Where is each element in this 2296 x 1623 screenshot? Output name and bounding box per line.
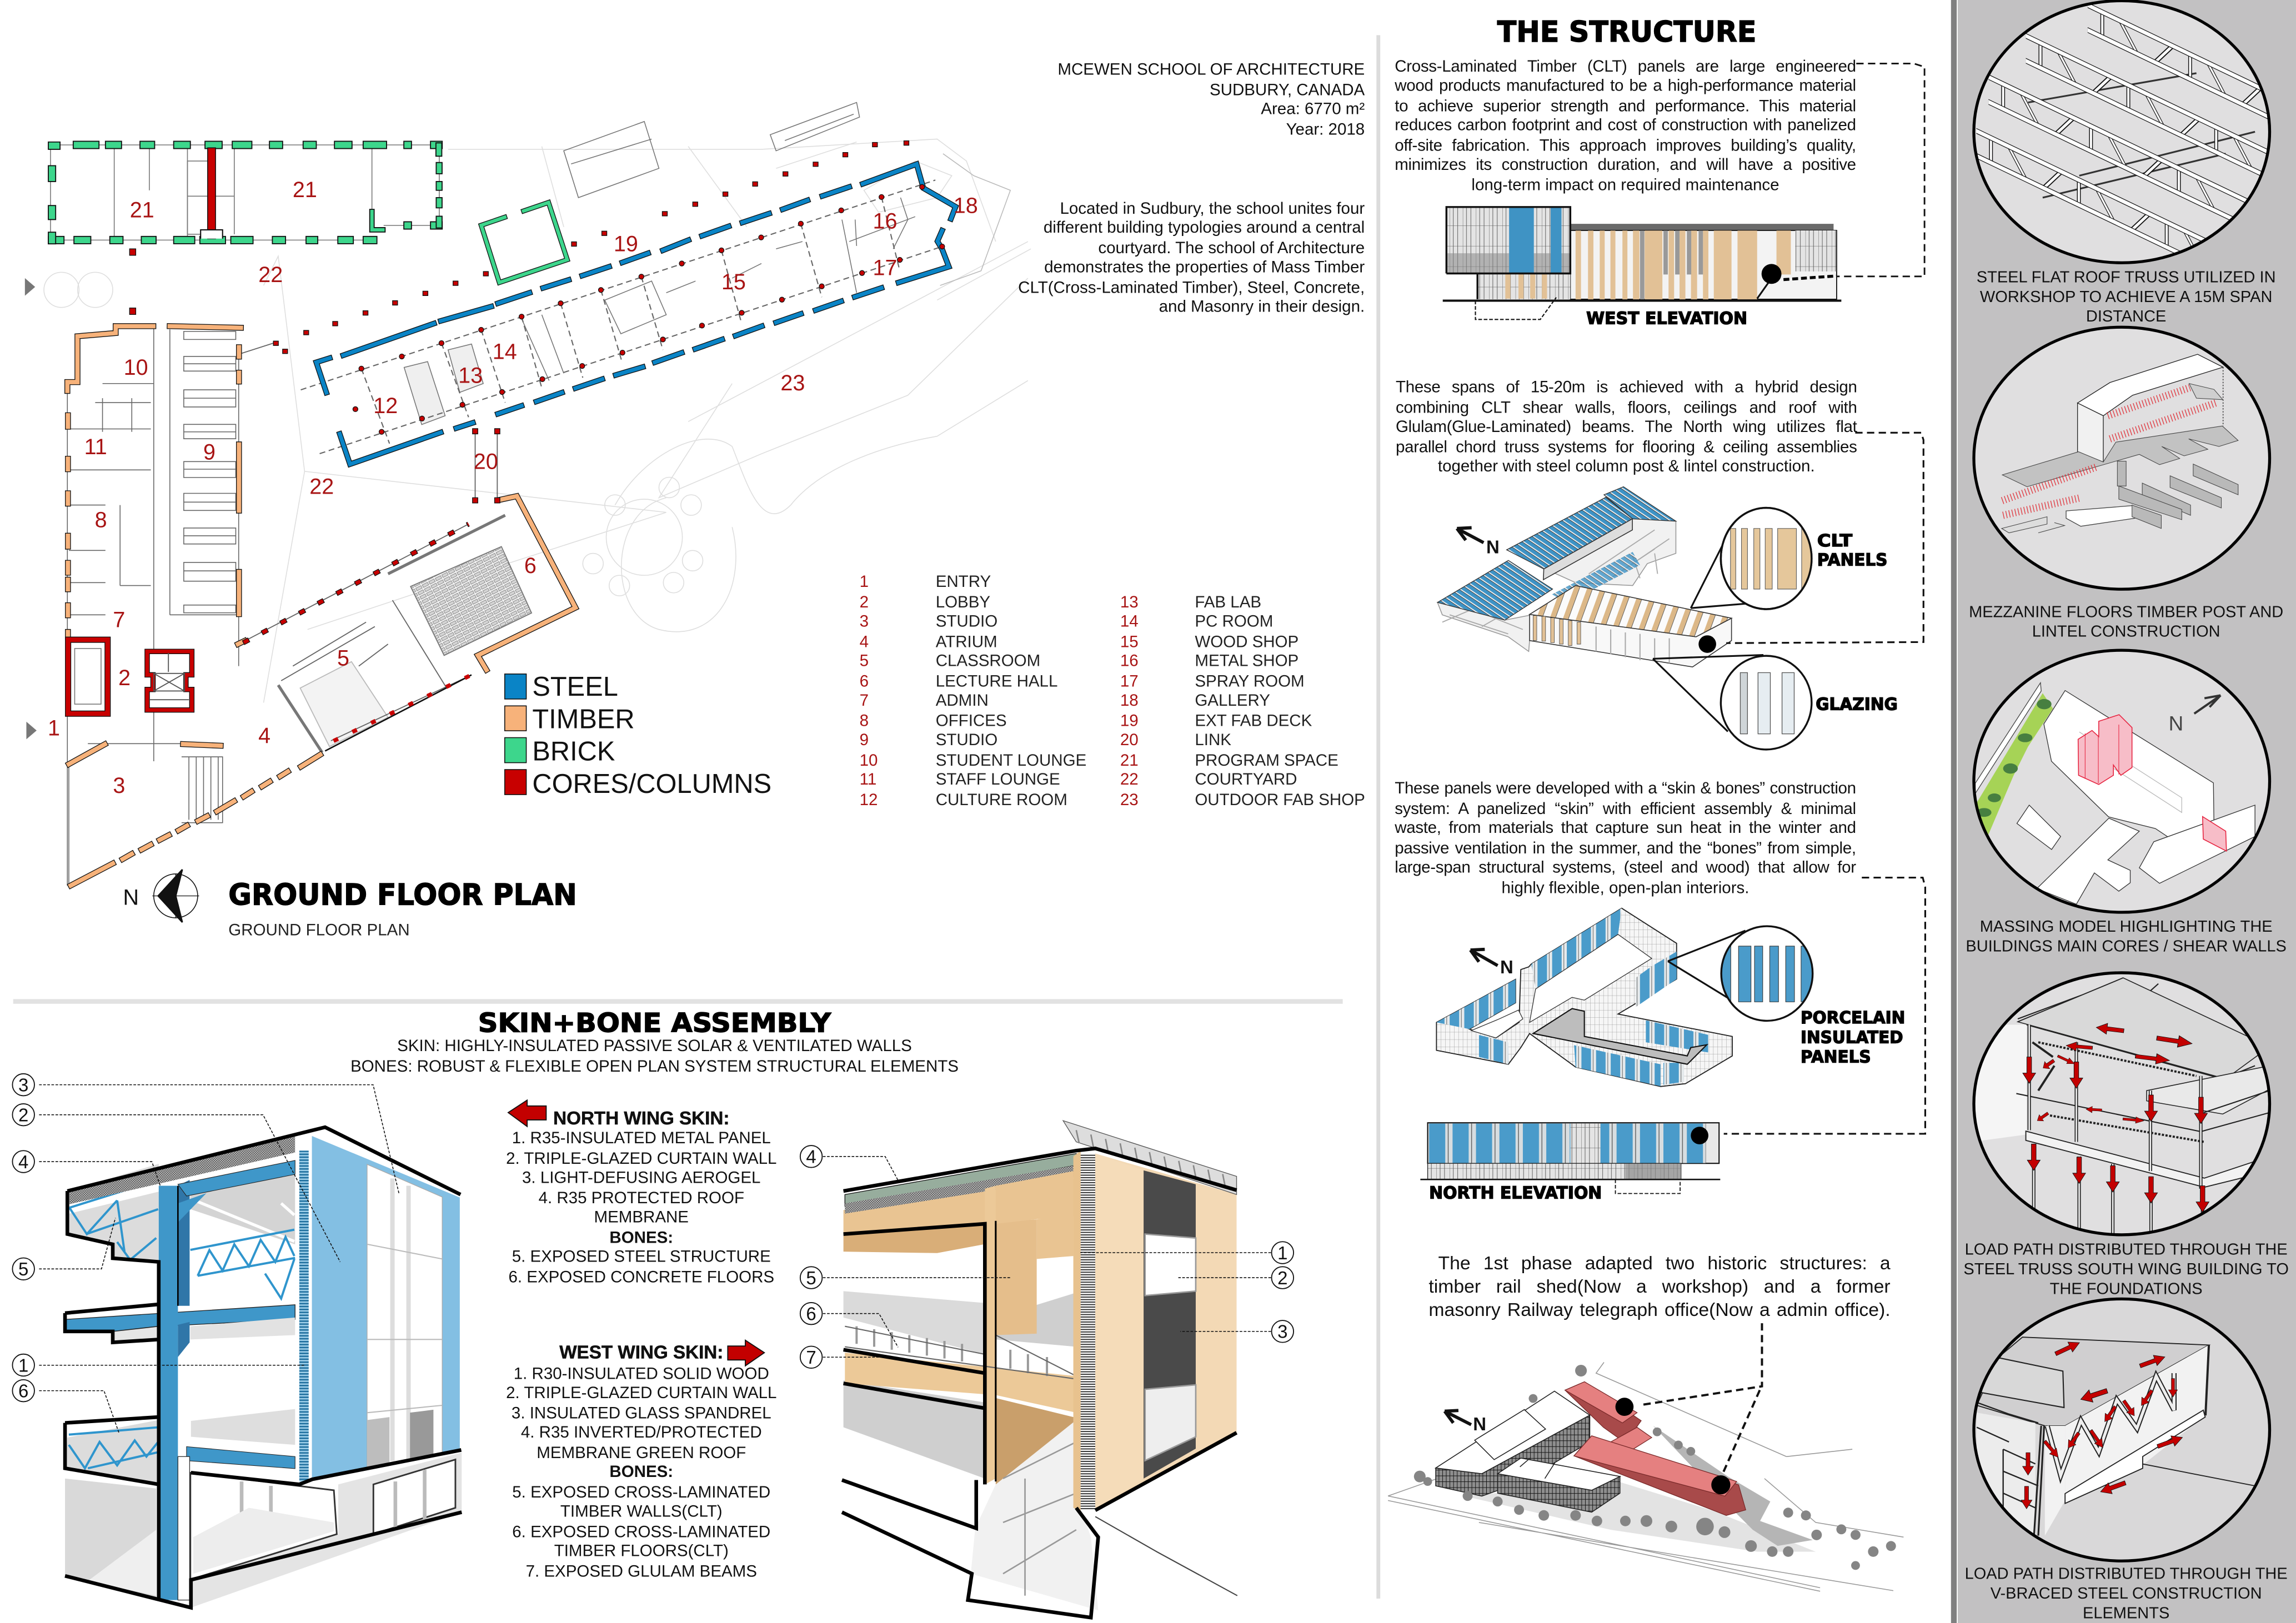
north wing specification list: MEMBRANE [594,1209,689,1227]
project description: courtyard. The school of Architecture [1098,239,1365,257]
room key names 13-23 [1195,594,1365,809]
callout 6: 6 [18,1381,28,1401]
caption: mezzanine timber: LINTEL CONSTRUCTION [2032,623,2220,641]
circle: steel roof truss [1972,0,2272,264]
callout 7 [800,1346,822,1368]
text block: hybrid spans [1396,379,1857,476]
room numbers: 13 [458,363,483,388]
caption: steel roof truss: STEEL FLAT ROOF TRUSS UTILIZED IN [1977,268,2276,286]
room key names 1-12: ATRIUM [936,634,997,651]
room numbers: 16 [873,209,897,233]
north wing specification list: 2. TRIPLE-GLAZED CURTAIN WALL [506,1150,776,1168]
room numbers: 7 [113,607,125,632]
label: north elevation: NORTH ELEVATION [1429,1183,1602,1203]
room key numbers 1-12: 10 [860,752,878,770]
facade shell [1436,908,1732,1087]
project description: CLT(Cross-Laminated Timber), Steel, Concrete, [1018,279,1365,297]
skin and bone title: SKIN+BONE ASSEMBLY [478,1008,831,1039]
callout 6: 6 [806,1304,816,1324]
north wing specification list: 1. R35-INSULATED METAL PANEL [512,1130,771,1148]
room key numbers 13-23: 13 [1120,594,1139,612]
panel: right grey strip [1951,0,2296,1623]
west wing specification list: 4. R35 INVERTED/PROTECTED [521,1425,762,1443]
caption: south wing load path: LOAD PATH DISTRIBUTED THROUGH THE [1965,1240,2288,1258]
room key numbers 13-23: 17 [1120,673,1139,691]
room key names 1-12: STAFF LOUNGE [936,772,1060,790]
roof layers [845,1154,1076,1206]
callout 1: 1 [1277,1243,1287,1263]
text block: skin and bones [1395,780,1856,897]
dashed connector: north elevation [1724,878,1925,1134]
room key numbers 13-23: 22 [1120,772,1139,790]
lower floor [65,1420,159,1484]
plan subtitle: GROUND FLOOR PLAN [228,921,410,939]
timber wall [996,1219,1037,1335]
truss frames [1437,519,1676,651]
room key numbers 1-12: 11 [860,772,876,790]
north wing specification list: 5. EXPOSED STEEL STRUCTURE [512,1249,771,1267]
lower grey level [844,1380,985,1479]
room key names 1-12: LOBBY [936,594,990,612]
icon: north arrow: N [1473,1414,1486,1434]
room numbers: 9 [203,440,215,464]
brick walls [48,141,442,244]
room numbers: 2 [118,666,131,690]
text block: first phase [1428,1252,1891,1320]
room numbers [48,178,978,798]
west wing specification list: 2. TRIPLE-GLAZED CURTAIN WALL [506,1385,776,1403]
icon: north arrow [1457,527,1500,557]
faint site context [44,139,1031,703]
red historic buildings [1565,1382,1746,1515]
callout 3: 3 [18,1074,28,1095]
callout 5: 5 [18,1259,28,1279]
courtyard [1533,1009,1707,1064]
lower windows [191,1460,455,1580]
room key numbers 13-23: 18 [1120,693,1139,710]
label: porcelain insulated panels: PANELS [1801,1048,1871,1067]
label: west elevation: WEST ELEVATION [1586,309,1747,329]
vertical divider [1376,35,1380,1599]
north wing specification list: BONES: [609,1229,673,1247]
room key numbers 13-23: 20 [1120,732,1139,750]
dashed connector: site [1640,1323,1762,1474]
project description: demonstrates the properties of Mass Timber [1044,259,1365,277]
room key numbers 1-12: 2 [860,594,869,612]
room key names 1-12: STUDENT LOUNGE [936,752,1086,770]
room key numbers 13-23: 15 [1120,634,1139,651]
caption: south wing load path: STEEL TRUSS SOUTH WING BUILDING TO [1963,1260,2289,1278]
text block: first phase: masonry Railway telegraph office(Now a admin office). [1428,1299,1891,1320]
callout 2 [1272,1267,1294,1289]
west wing specification list: 7. EXPOSED GLULAM BEAMS [526,1563,757,1581]
north elevation drawing [1420,1123,1720,1194]
blue steel trusses [69,1180,295,1468]
room key names 13-23: LINK [1195,732,1231,750]
upper wood beams [844,1178,1076,1234]
room key numbers 1-12: 9 [860,732,869,750]
upper ceiling [191,1174,295,1244]
red load arrows [2023,1022,2209,1212]
room key numbers 13-23 [1120,594,1139,809]
callout 6 [12,1380,34,1401]
legend: materials [505,672,771,799]
west wing specification list: MEMBRANE GREEN ROOF [537,1445,746,1462]
curtain wall hatch edge [299,1150,309,1481]
thick black outline [65,1127,462,1607]
project info [1057,62,1365,138]
room numbers: 14 [493,339,517,364]
label: porcelain insulated panels: PORCELAIN [1801,1008,1905,1028]
callout 2 [12,1104,34,1125]
north wing specification list: 4. R35 PROTECTED ROOF [539,1189,744,1207]
project info: MCEWEN SCHOOL OF ARCHITECTURE [1057,62,1365,79]
room numbers: 23 [780,371,805,395]
west elevation drawing [1443,207,1841,319]
north compass [123,870,199,922]
caption: v-braced load path: V-BRACED STEEL CONSTRUCTION [1991,1585,2262,1602]
icon: north wing red arrow [508,1100,546,1127]
skin and bone subtitle: BONES: ROBUST & FLEXIBLE OPEN PLAN SYSTEM STRUCTURAL ELEMENTS [350,1058,959,1075]
west wing callouts [823,1157,1271,1357]
room key names 1-12: STUDIO [936,614,997,631]
circle: v-braced load path [1973,1298,2270,1562]
icon: north arrow: N [1500,957,1513,977]
callout 3 [1272,1320,1294,1343]
west wing specification list: TIMBER FLOORS(CLT) [554,1544,729,1561]
west wing specification list: 3. INSULATED GLASS SPANDREL [512,1405,771,1423]
north arrow in circle [2194,695,2220,713]
porcelain skin axonometric [1436,908,1732,1087]
room key numbers 13-23: 14 [1120,614,1139,631]
north wing specification list: 3. LIGHT-DEFUSING AEROGEL [522,1170,760,1187]
room key numbers 1-12: 1 [860,574,869,592]
callout 3: 3 [1277,1321,1287,1342]
west wing specification list [506,1343,776,1581]
room numbers: 3 [113,773,125,798]
room key names 1-12: ADMIN [936,693,989,710]
callout 1 [12,1354,34,1376]
caption: south wing load path: THE FOUNDATIONS [2050,1280,2203,1298]
room numbers: 11 [84,435,107,459]
text block: skin and bones: passive ventilation in the summer, and the “bones” from simple, [1395,840,1856,857]
site axonometric [1388,1362,1903,1591]
text block: CLT panels: long-term impact on required maintenance [1471,177,1779,194]
caption: mezzanine timber: MEZZANINE FLOORS TIMBER POST AND [1969,603,2283,621]
icon: west wing red arrow [728,1340,764,1366]
room key names 13-23: PROGRAM SPACE [1195,752,1339,770]
dark facades [1436,1415,1590,1496]
mid floor [845,1353,1076,1413]
room key names 13-23: SPRAY ROOM [1195,673,1305,691]
north wing section drawing [65,1127,462,1607]
room key names 13-23: FAB LAB [1195,594,1261,612]
room key names 13-23: OUTDOOR FAB SHOP [1195,792,1365,809]
text block: skin and bones: waste, from materials that capture sun heat in the winter and [1395,820,1856,837]
room numbers: 10 [124,355,148,380]
floor plan drawing [25,103,1031,886]
room key names 1-12: CLASSROOM [936,654,1040,671]
room numbers: 21 [130,198,154,222]
callout 5 [800,1267,822,1289]
room key numbers 1-12 [860,574,878,809]
caption: v-braced load path: ELEMENTS [2083,1604,2169,1622]
room key names 13-23: WOOD SHOP [1195,634,1299,651]
west wing specification list: WEST WING SKIN: [559,1343,723,1363]
callout 4 [800,1145,822,1168]
dashed connector: axonometric [1726,433,1923,643]
timber walls [67,326,575,886]
text block: first phase: The 1st phase adapted two historic structures: a [1438,1252,1891,1274]
text block: hybrid spans: together with steel column post & lintel construction. [1438,458,1815,476]
room key names 13-23: COURTYARD [1195,772,1297,790]
room numbers: 1 [48,716,60,741]
foundation [971,1420,1098,1610]
room numbers: 19 [614,232,638,256]
caption: massing model: MASSING MODEL HIGHLIGHTING THE [1980,918,2273,936]
skin and bone subtitle [350,1038,959,1075]
callout 5: 5 [806,1268,816,1288]
text block: hybrid spans: Glulam(Glue-Laminated) beams. The North wing utilizes flat [1396,419,1857,436]
room key numbers 13-23: 21 [1120,752,1139,770]
legend item: timber: TIMBER [532,704,635,734]
label: circle north: N [2169,712,2183,735]
upper left soffit [68,1164,159,1262]
callout 6 [800,1303,822,1324]
skin and bone subtitle: SKIN: HIGHLY-INSULATED PASSIVE SOLAR & VENTILATED WALLS [397,1038,912,1056]
white roofs [1436,1391,1620,1490]
text block: hybrid spans: parallel chord truss systems for flooring & ceiling assemblies [1396,439,1857,456]
text block: CLT panels: minimizes its construction duration, and will have a positive [1395,157,1856,174]
project info: Year: 2018 [1286,121,1365,138]
detail circle: CLT panels [1691,508,1812,609]
north compass: N [123,885,139,910]
label: CLT panels [1817,531,1887,570]
room key names 13-23: EXT FAB DECK [1195,712,1312,730]
north wing specification list: NORTH WING SKIN: [553,1107,729,1128]
legend item: brick: BRICK [532,737,615,767]
room key names 1-12: CULTURE ROOM [936,792,1067,809]
text block: CLT panels: to achieve superior strength and performance. This material [1395,97,1856,115]
text block: skin and bones: large-span structural systems, (steel and wood) that allow for [1395,860,1856,877]
text block: hybrid spans: combining CLT shear walls, floors, ceilings and roof with [1396,399,1857,416]
text block: CLT panels: off-site fabrication. This approach improves building’s quality, [1395,137,1856,154]
white roof [1530,934,1652,1022]
interior linework: classroom and lecture hall [239,343,532,752]
site lines [1388,1362,1903,1591]
room key names 1-12: OFFICES [936,712,1007,730]
interior linework: brick building [51,145,439,240]
callout 1: 1 [18,1355,28,1375]
west wing specification list: 6. EXPOSED CROSS-LAMINATED [512,1524,770,1541]
callout 5 [12,1258,34,1280]
callout 3 [12,1074,34,1096]
steel walls [316,164,956,464]
north wing specification list: 6. EXPOSED CONCRETE FLOORS [508,1269,774,1286]
room numbers: 6 [524,554,537,578]
label: porcelain insulated panels [1801,1008,1905,1067]
room key numbers 13-23: 23 [1120,792,1139,809]
west wing specification list: 5. EXPOSED CROSS-LAMINATED [512,1484,770,1501]
dots [1616,1398,1633,1416]
legend item: steel: STEEL [532,672,618,702]
column grid lines: south wing [301,180,942,454]
project description: and Masonry in their design. [1159,299,1365,316]
callout 7: 7 [806,1347,816,1368]
blue columns [159,1186,178,1600]
north wing callouts [39,1085,399,1433]
callout 4 [12,1150,34,1173]
room key numbers 1-12: 6 [860,673,869,691]
room numbers: 4 [258,723,270,748]
room key names 1-12: STUDIO [936,732,997,750]
project description [1018,200,1365,316]
label: glazing: GLAZING [1816,695,1898,715]
text block: CLT panels: Cross-Laminated Timber (CLT) panels are large engineered [1395,58,1856,76]
room key numbers 13-23: 19 [1120,712,1139,730]
caption: v-braced load path: LOAD PATH DISTRIBUTED THROUGH THE [1965,1565,2288,1582]
text block: CLT panels [1395,58,1856,194]
room key numbers 1-12: 8 [860,712,869,730]
detail circle: glazing [1653,655,1812,750]
blue bands [1436,908,1709,1086]
circle: massing model [1973,650,2270,913]
room numbers: 8 [95,508,107,532]
room key names 13-23: PC ROOM [1195,614,1273,631]
icon: north arrow: N [1486,537,1500,557]
text block: skin and bones: system: A panelized “skin” with efficient assembly & minimal [1395,800,1856,817]
text block: skin and bones: These panels were developed with a “skin & bones” construction [1395,780,1856,798]
text block: CLT panels: reduces carbon footprint and cost of construction with panelized [1395,117,1856,135]
icon: north arrow [1471,949,1513,977]
project description: Located in Sudbury, the school unites four [1060,200,1365,218]
facade panels [312,1136,460,1479]
room key numbers 1-12: 7 [860,693,869,710]
callout 2: 2 [1277,1268,1287,1288]
project description: different building typologies around a central [1044,219,1365,237]
cores and columns [68,141,945,751]
ground paths [1464,1481,1816,1552]
text block: CLT panels: wood products manufactured to be a high-performance material [1395,78,1856,95]
section title: THE STRUCTURE [1497,16,1756,49]
blue roofs [1437,487,1676,620]
callout 2: 2 [18,1105,28,1125]
caption: massing model: BUILDINGS MAIN CORES / SHEAR WALLS [1966,938,2287,956]
room numbers: 15 [721,270,746,294]
room numbers: 5 [337,646,349,670]
upper blue beam [178,1160,295,1196]
red force arrows [2021,1338,2184,1509]
dashed connector: west elevation [1837,63,1924,277]
room numbers: 21 [293,178,317,202]
room numbers: 12 [373,394,398,418]
room numbers: 18 [954,193,978,218]
room numbers: 22 [258,263,283,287]
room key numbers 1-12: 5 [860,654,869,671]
room key numbers 13-23: 16 [1120,654,1139,671]
text block: hybrid spans: These spans of 15-20m is achieved with a hybrid design [1396,379,1857,396]
callout 1 [1272,1242,1294,1264]
legend item: cores and columns: CORES/COLUMNS [532,769,771,799]
room key names 1-12: ENTRY [936,574,991,592]
label: CLT panels: PANELS [1817,551,1887,570]
room key numbers 1-12: 4 [860,634,869,651]
west wing specification list: BONES: [609,1464,673,1482]
plan title: GROUND FLOOR PLAN [228,878,577,912]
label: CLT panels: CLT [1817,531,1852,551]
west wing specification list: 1. R30-INSULATED SOLID WOOD [514,1365,769,1383]
west wing specification list: TIMBER WALLS(CLT) [560,1504,723,1521]
room key numbers 1-12: 3 [860,614,869,631]
room key names 1-12 [935,574,1086,809]
circle: south wing load path [1972,972,2270,1244]
entry markers [25,278,37,739]
project info: SUDBURY, CANADA [1210,81,1365,99]
interior linework: south wing [404,103,1010,425]
west wing section drawing [842,1120,1237,1617]
trees [1414,1365,1896,1570]
label: porcelain insulated panels: INSULATED [1801,1028,1903,1047]
icon: north arrow [1445,1410,1486,1434]
room key numbers 1-12: 12 [860,792,878,809]
circle: mezzanine timber [1973,326,2270,590]
horizontal divider [13,999,1343,1004]
caption: steel roof truss: WORKSHOP TO ACHIEVE A 15M SPAN [1980,288,2272,306]
interior linework: west wing [67,326,239,886]
hatched edge and wood facade [1074,1150,1081,1511]
room numbers: 20 [474,449,498,474]
callout 4: 4 [806,1147,816,1167]
room key names 13-23: METAL SHOP [1195,654,1299,671]
thick black outline [842,1148,1237,1617]
text block: first phase: timber rail shed(Now a workshop) and a former [1428,1275,1891,1297]
project info: Area: 6770 m² [1261,101,1365,119]
timber wing [1530,615,1732,667]
hybrid structure axonometric [1437,487,1732,667]
mid floor slabs [65,1305,295,1331]
detail circle: porcelain panels [1668,926,1816,1021]
lower level fill [65,1479,156,1600]
text block: skin and bones: highly flexible, open-plan interiors. [1502,879,1749,897]
room key names 13-23: GALLERY [1195,693,1270,710]
room key names 1-12: LECTURE HALL [936,673,1057,691]
parapet [1063,1120,1237,1194]
callout 4: 4 [18,1152,28,1172]
north wing specification list [506,1107,776,1286]
caption: steel roof truss: DISTANCE [2086,308,2166,325]
room numbers: 22 [309,475,334,499]
roof hatch band [69,1137,295,1204]
room numbers: 17 [873,255,897,280]
